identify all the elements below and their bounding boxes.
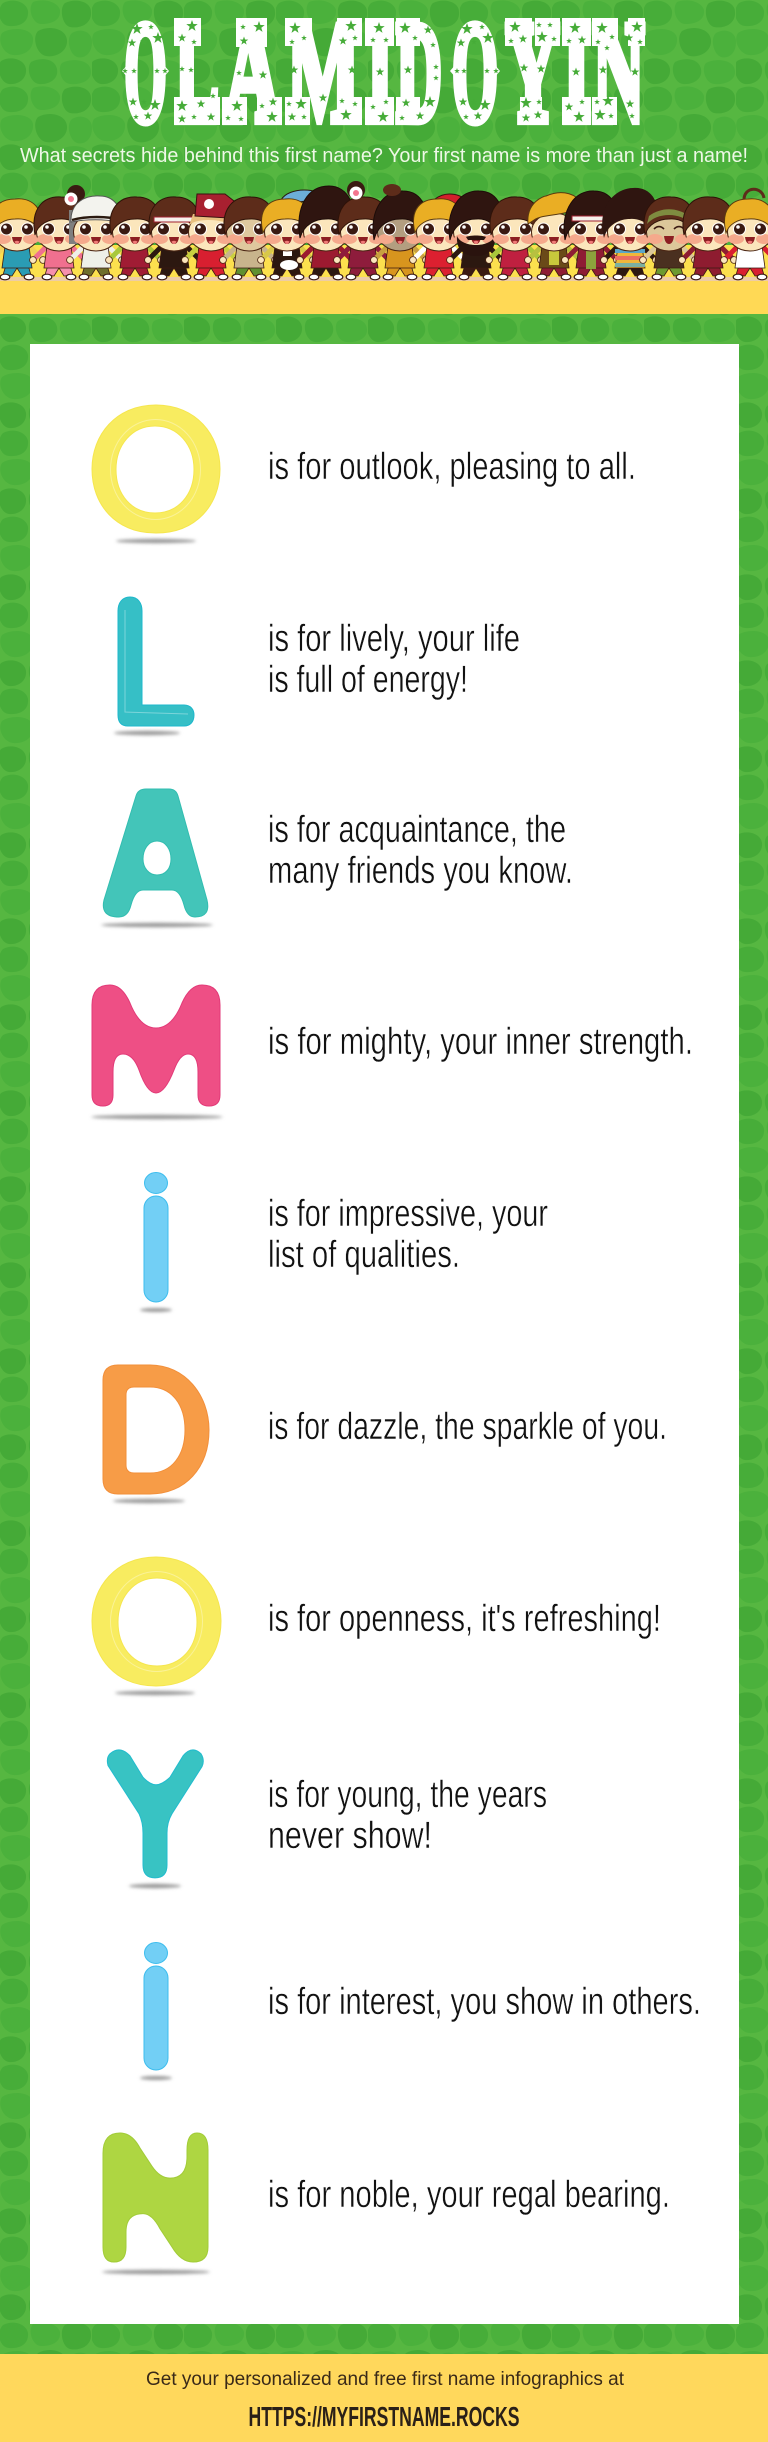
icon: green letter N bbox=[102, 2133, 210, 2274]
text: impressive: is for impressive, your bbox=[268, 1193, 548, 1235]
white content panel bbox=[30, 344, 739, 2324]
row 4: M mighty bbox=[91, 985, 693, 1119]
icon: pink letter M bbox=[91, 985, 223, 1119]
row 2: L lively bbox=[114, 597, 520, 735]
row 9: i interest bbox=[140, 1942, 701, 2080]
icon: orange letter D bbox=[103, 1365, 209, 1503]
yellow ground band bbox=[0, 245, 768, 314]
text: openness: is for openness, it's refreshing! bbox=[268, 1598, 661, 1640]
title block serifs bbox=[122, 18, 645, 125]
text: young bbox=[268, 1774, 547, 1857]
text: lively: is full of energy! bbox=[268, 659, 468, 701]
text: outlook: is for outlook, pleasing to all. bbox=[268, 446, 636, 488]
icon: yellow letter O bbox=[92, 405, 220, 543]
text: acquaintance bbox=[268, 809, 573, 892]
text: lively: is for lively, your life bbox=[268, 618, 520, 660]
crowd of cartoon children bbox=[0, 181, 768, 280]
row 6: D dazzle bbox=[103, 1365, 667, 1503]
text: impressive bbox=[268, 1193, 548, 1276]
footer text: Get your personalized and free first name infographics at bbox=[146, 2368, 625, 2390]
text: acquaintance: is for acquaintance, the bbox=[268, 809, 566, 851]
text: acquaintance: many friends you know. bbox=[268, 850, 573, 892]
row 3: A acquaintance bbox=[101, 789, 573, 927]
text: lively bbox=[268, 618, 520, 701]
row 8: Y young bbox=[107, 1750, 547, 1888]
row 5: i impressive bbox=[140, 1172, 548, 1312]
icon: blue letter i bbox=[140, 1942, 172, 2080]
title stars bbox=[122, 20, 643, 123]
footer band bbox=[0, 2354, 768, 2442]
text: impressive: list of qualities. bbox=[268, 1234, 460, 1276]
title bbox=[122, 0, 645, 153]
icon: teal letter Y bbox=[107, 1750, 203, 1888]
row 1: O outlook bbox=[92, 405, 636, 543]
icon: teal letter A bbox=[101, 789, 213, 927]
text: young: is for young, the years bbox=[268, 1774, 547, 1816]
row 7: O openness bbox=[92, 1557, 661, 1695]
icon: blue letter i bbox=[140, 1172, 172, 1312]
icon: teal letter L bbox=[114, 597, 194, 735]
footer url: HTTPS://MYFIRSTNAME.ROCKS bbox=[248, 2401, 520, 2432]
row 10: N noble bbox=[102, 2133, 670, 2274]
text: young: never show! bbox=[268, 1815, 432, 1857]
icon: yellow letter O bbox=[92, 1557, 221, 1695]
subtitle: What secrets hide behind this first name? Your first name is more than just a name! bbox=[20, 145, 748, 167]
